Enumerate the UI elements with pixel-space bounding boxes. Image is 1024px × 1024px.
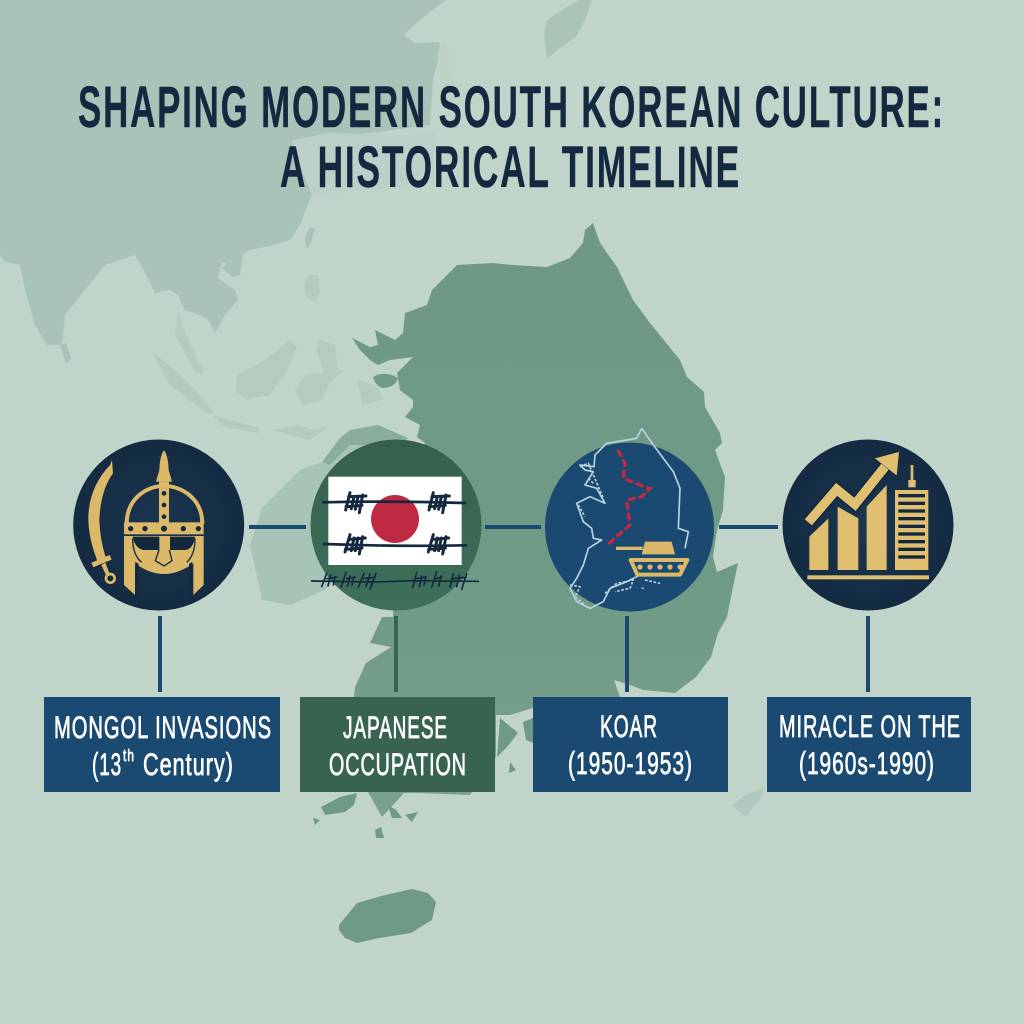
panel: Korean War icon: [545, 428, 714, 612]
map: southeast Asian islands: [152, 275, 383, 440]
label: Korean War: KOAR: [600, 708, 658, 744]
panel: Mongol invasions icon: [73, 440, 244, 610]
label: Miracle on the Han: (1960s-1990): [799, 745, 935, 781]
icon: bar chart: [807, 485, 929, 579]
label: Japanese occupation: [300, 697, 495, 792]
title: A HISTORICAL TIMELINE: [280, 135, 741, 200]
icon: tank: [616, 542, 687, 575]
panel: economic miracle icon: [782, 440, 954, 610]
icon: skyscraper: [895, 465, 928, 570]
icon: sword: [88, 460, 115, 583]
label: Korean War: [533, 697, 728, 792]
icon: helmet: [124, 450, 204, 596]
map: northern island: [544, 0, 592, 59]
icon: rising arrow: [808, 452, 899, 522]
map: faint northern peninsula: [292, 133, 437, 196]
icon: red front line: [609, 451, 650, 543]
map: islets above the occupation circle: [322, 425, 408, 465]
map: Korean Peninsula: [352, 223, 738, 817]
label: Japanese occupation: JAPANESE: [343, 709, 448, 745]
icon: barbed wire: [312, 493, 478, 589]
map: small southern islands: [60, 227, 315, 364]
title: [78, 75, 945, 200]
label: Mongol invasions: Century): [143, 746, 234, 782]
map: Jeju island: [339, 889, 436, 943]
icon: flag: [328, 477, 462, 565]
map: medium coast shading: [250, 428, 407, 605]
panel: Japanese occupation icon: [310, 440, 482, 610]
label: Mongol invasions: MONGOL INVASIONS: [54, 709, 272, 745]
icon: peninsula outline: [570, 428, 688, 608]
map: thin island chain: [440, 43, 451, 100]
label: Korean War: (1950-1953): [568, 745, 693, 781]
label: Mongol invasions: th: [123, 746, 135, 765]
map: Asian mainland: [0, 0, 446, 345]
label: Mongol invasions: (13: [92, 746, 122, 782]
map: eastern smear: [732, 787, 764, 817]
connector lines: [158, 525, 870, 692]
label: Mongol invasions: [44, 697, 280, 792]
map: small southern coast islands: [313, 374, 533, 838]
label: Japanese occupation: OCCUPATION: [329, 746, 467, 782]
label: Miracle on the Han: [767, 697, 971, 792]
background map: [0, 0, 764, 943]
